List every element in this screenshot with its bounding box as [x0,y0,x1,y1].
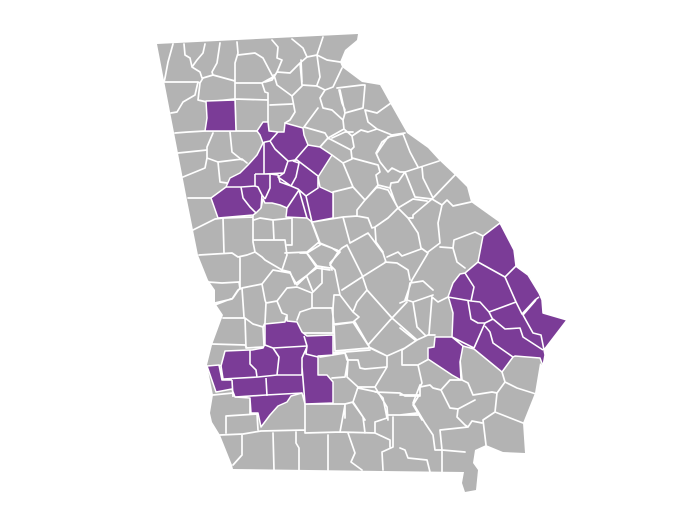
highlighted cluster: southwest [207,317,333,427]
southeast county fills [428,223,567,380]
highlighted cluster: Atlanta area [211,122,333,222]
Atlanta area county fills [211,122,333,222]
Atlanta area county dividers [226,132,318,222]
highlighted cluster: southeast coast [428,223,567,380]
county borders [164,37,536,472]
highlighted county: northwest [205,100,236,131]
southeast county dividers [448,262,544,357]
southwest county fills [207,317,333,427]
southwest county dividers [219,336,318,404]
state silhouette [157,34,567,492]
